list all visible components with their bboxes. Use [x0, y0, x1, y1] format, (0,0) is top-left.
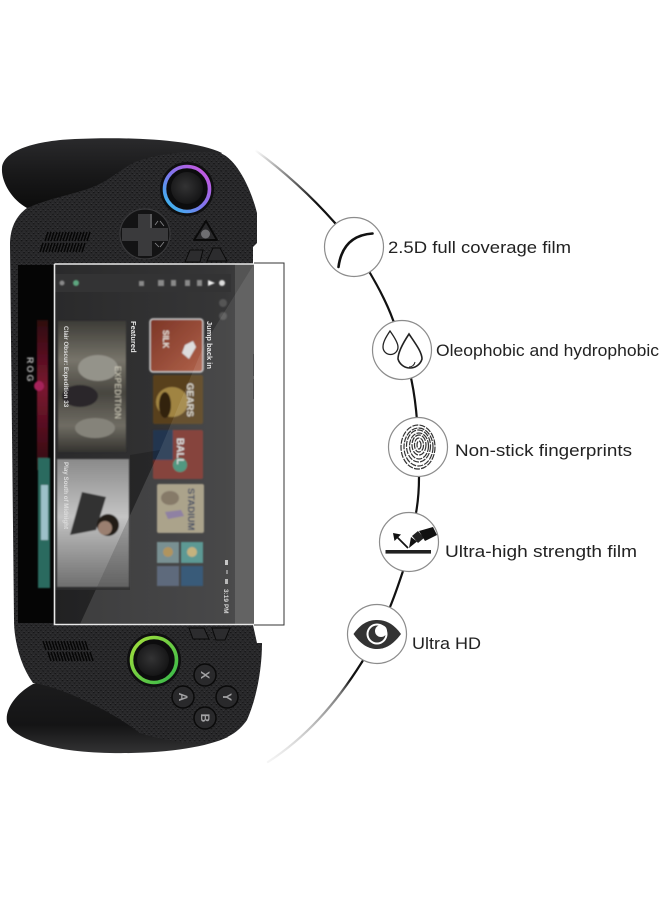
speaker grille bottom	[43, 641, 93, 661]
top joystick with RGB ring	[160, 162, 214, 216]
small menu buttons top	[185, 248, 227, 262]
featured tile captions	[62, 326, 68, 529]
featured game tile one: EXPEDITION	[113, 366, 122, 419]
clock and system tray	[224, 560, 228, 614]
label: ultra HD: Ultra HD	[412, 634, 481, 653]
label: oleophobic and hydrophobic: Oleophobic and hydrophobic	[436, 341, 660, 360]
bottom joystick with RGB ring	[127, 633, 181, 687]
top grip	[2, 138, 222, 208]
game tile silksong	[150, 319, 203, 372]
infographic canvas	[2, 138, 658, 763]
glare band right	[235, 264, 254, 624]
label: ultra-high strength film: Ultra-high strength film	[445, 542, 637, 561]
top status bar	[56, 274, 68, 292]
label: 2.5D full coverage film: 2.5D full coverage film	[388, 238, 571, 257]
game tile stadium: STADIUM	[185, 488, 196, 531]
bottom grip	[7, 660, 228, 753]
game tile three	[153, 430, 203, 479]
game tile gears: GEARS	[184, 383, 195, 417]
game tile three: BALL	[174, 438, 185, 465]
speaker grille top	[40, 232, 90, 252]
featured game tile two	[57, 459, 129, 587]
curved connector line	[255, 150, 419, 762]
left screen strip: ROG	[25, 357, 35, 384]
game console device	[2, 138, 284, 753]
face buttons XABY: X	[198, 671, 212, 679]
feature: oleophobic and hydrophobic	[372, 320, 660, 380]
face buttons XABY: B	[198, 714, 212, 723]
icon: water drops	[372, 320, 432, 380]
icon: scratch resistance pen	[380, 512, 438, 572]
section heading featured: Featured	[129, 321, 138, 353]
small menu buttons bottom	[189, 628, 230, 640]
icon: eye	[348, 604, 406, 664]
icon: fingerprint	[388, 418, 448, 476]
feature: ultra HD	[348, 604, 481, 664]
left screen strip	[25, 320, 50, 588]
clock and system tray: 3:19 PM	[222, 589, 229, 614]
face buttons XABY	[172, 664, 238, 729]
screen base	[18, 265, 254, 623]
face buttons XABY: Y	[220, 693, 234, 701]
status bar icons	[60, 280, 227, 320]
feature: 2.5D full coverage film	[324, 218, 571, 276]
game tile gears	[153, 375, 203, 424]
right side buttons	[253, 354, 256, 399]
triangle button	[194, 221, 217, 240]
game tile stadium	[157, 484, 204, 533]
feature: ultra-high strength film	[380, 512, 637, 572]
screen behind film	[55, 264, 254, 624]
featured tile captions: Play South of Midnight	[62, 462, 69, 529]
film glare overlay	[80, 264, 254, 624]
featured game tile one	[58, 321, 126, 452]
d-pad	[120, 209, 170, 259]
game tile silksong: SILK	[161, 330, 170, 348]
section heading jump back in: Jump back in	[205, 321, 214, 369]
small game tiles	[157, 542, 203, 586]
feature: non-stick fingerprints	[388, 418, 632, 476]
featured tile captions: Clair Obscur: Expedition 33	[62, 326, 69, 408]
label: non-stick fingerprints: Non-stick fingerprints	[455, 441, 632, 460]
screen protector film outline	[54, 263, 284, 625]
face buttons XABY: A	[176, 693, 190, 702]
console body	[10, 152, 262, 743]
icon: curved film edge	[324, 218, 384, 276]
